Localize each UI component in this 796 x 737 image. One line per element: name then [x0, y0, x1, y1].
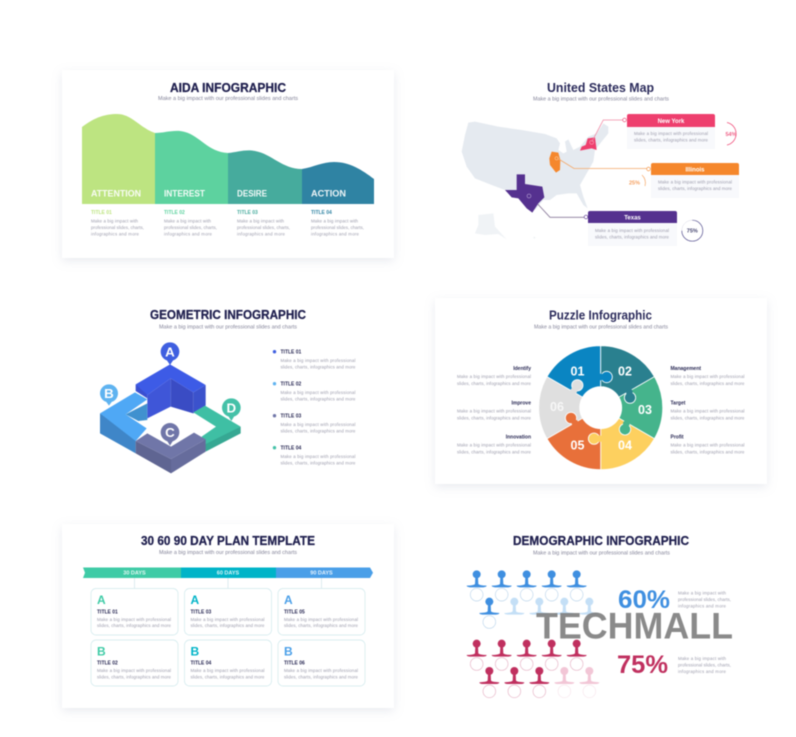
- card: A title 03: A: [190, 593, 200, 607]
- card: B title 02: B: [97, 644, 106, 658]
- panel: AIDA infographic: [62, 70, 394, 258]
- puzzle numbers: 05: [571, 438, 584, 452]
- list item: title 02: [273, 382, 356, 402]
- panel: 30 60 90 day plan: [62, 524, 394, 708]
- column text: interest: professional slides, charts,: [164, 225, 217, 230]
- callout: Texas: slides, charts, infographics and more: [595, 234, 670, 240]
- label: Improve: slides, charts, infographics and more: [457, 416, 532, 420]
- column text: desire: [237, 210, 290, 236]
- label: Profit: Profit: [670, 434, 684, 440]
- panel: United States map: [462, 81, 739, 246]
- list item: title 04: Make a big impact with professional: [280, 454, 356, 459]
- list item: title 03: TITLE 03: [280, 414, 302, 420]
- label: Innovation: [457, 434, 532, 454]
- chart: puzzle ring: [539, 346, 663, 470]
- column text: attention: [91, 210, 144, 236]
- icons: blue pacifiers 60%: [467, 570, 599, 628]
- card: A title 01: A: [97, 593, 106, 607]
- card: A title 05: [278, 588, 365, 635]
- timeline bar: 30 DAYS: [123, 571, 146, 577]
- callout: New York: Make a big impact with professional: [634, 131, 708, 136]
- percent ring: 54%: [725, 122, 737, 145]
- list item: title 02: Make a big impact with professional: [280, 390, 356, 395]
- list item: title 01: TITLE 01: [280, 350, 302, 356]
- marker: D: D: [227, 400, 237, 415]
- timeline bar: 60 DAYS: [217, 571, 240, 577]
- puzzle numbers: [550, 364, 652, 452]
- card: A title 03: [184, 588, 272, 635]
- diagram: isometric square: [100, 342, 241, 473]
- connector: Illinois: [557, 158, 648, 168]
- label: Improve: Make a big impact with professional: [457, 408, 531, 414]
- marker: C: [161, 423, 179, 446]
- title: Geometric: GEOMETRIC INFOGRAPHIC: [150, 308, 306, 322]
- column text: interest: TITLE 02: [164, 210, 185, 216]
- card: B title 06: [278, 640, 365, 686]
- subtitle: Geometric: Make a big impact with our professional slides and charts: [159, 324, 298, 330]
- chart: AIDA wave: DESIRE: [237, 188, 267, 198]
- puzzle numbers: 06: [550, 400, 564, 414]
- stat text: 60%: infographics and more: [678, 604, 727, 608]
- card: B title 02: slides, charts, infographics and more: [97, 674, 172, 680]
- card: B title 06: TITLE 06: [284, 660, 305, 666]
- title: plan: 30 60 90 DAY PLAN TEMPLATE: [141, 534, 315, 548]
- card: A title 05: Make a big impact with professional: [284, 617, 358, 622]
- puzzle numbers: 01: [571, 364, 584, 378]
- card: A title 03: TITLE 03: [190, 610, 212, 616]
- card: A title 05: TITLE 05: [284, 610, 305, 616]
- label: Improve: [457, 400, 532, 420]
- card: A title 01: slides, charts, infographics and more: [97, 623, 172, 628]
- chart: AIDA wave: ATTENTION: [91, 188, 141, 198]
- label: Target: Target: [670, 400, 686, 406]
- list item: title 04: TITLE 04: [280, 446, 302, 452]
- label: Identify: slides, charts, infographics and more: [457, 381, 532, 386]
- stat text: 75%: infographics and more: [678, 669, 727, 674]
- percent ring: 75%: [682, 220, 703, 241]
- label: Improve: Improve: [512, 400, 531, 406]
- subtitle: Puzzle: Make a big impact with our professional slides and charts: [534, 324, 669, 330]
- list item: title 04: [273, 446, 356, 466]
- chart: AIDA wave: [82, 114, 374, 204]
- card: A title 05: A: [284, 593, 293, 607]
- column text: action: infographics and more: [311, 232, 360, 236]
- callout: Illinois: slides, charts, infographics and more: [658, 186, 733, 191]
- card: B title 06: Make a big impact with professional: [284, 668, 358, 673]
- label: Target: [670, 400, 745, 420]
- stat text: 60%: [678, 590, 731, 608]
- list item: title 01: Make a big impact with professional: [280, 358, 356, 363]
- label: Target: slides, charts, infographics and more: [670, 416, 745, 420]
- card: B title 04: TITLE 04: [190, 660, 212, 666]
- column text: action: [311, 210, 364, 236]
- percent ring: 25%: 25%: [629, 180, 640, 186]
- stat text: 75%: Make a big impact with: [678, 656, 727, 661]
- timeline bar: [83, 568, 373, 578]
- label: Innovation: Make a big impact with professional: [457, 442, 531, 448]
- connector lines: [134, 578, 322, 588]
- column text: action: Make a big impact with: [311, 218, 359, 224]
- list item: title 03: Make a big impact with professional: [280, 422, 356, 427]
- column text: interest: [164, 210, 217, 236]
- chart: AIDA wave: ACTION: [311, 188, 346, 198]
- marker: B: [100, 384, 118, 406]
- callout: New York: New York: [658, 119, 685, 125]
- panel: Geometric infographic: [100, 308, 356, 473]
- label: Management: [670, 366, 745, 386]
- list item: title 04: slides, charts, infographics and more: [280, 460, 356, 466]
- callout: New York: slides, charts, infographics and more: [634, 138, 709, 142]
- state: New York: [580, 137, 597, 151]
- stat text: 60%: Make a big impact with: [678, 590, 727, 596]
- stat text: 75%: professional slides, charts,: [678, 662, 731, 668]
- card: B title 04: B: [190, 644, 200, 658]
- list item: title 02: TITLE 02: [280, 382, 302, 388]
- title: United States Map: United States Map: [547, 81, 654, 95]
- marker: A: A: [165, 344, 175, 359]
- icons: red pacifiers 75%: [467, 640, 599, 698]
- label: Identify: Identify: [513, 366, 531, 372]
- block: B: [100, 392, 147, 453]
- label: Innovation: slides, charts, infographics and more: [457, 450, 532, 454]
- callout: Illinois: [647, 163, 739, 198]
- label: Management: Management: [670, 366, 701, 372]
- card: A title 01: Make a big impact with professional: [97, 617, 171, 622]
- card: B title 06: B: [284, 644, 293, 658]
- label: Identify: [457, 366, 532, 386]
- block: A: [136, 364, 206, 418]
- list item: title 03: [273, 414, 356, 434]
- puzzle knobs: [565, 371, 636, 444]
- stat text: 60%: professional slides, charts,: [678, 597, 731, 602]
- puzzle numbers: 02: [618, 364, 632, 378]
- stat: 75%: 75%: [617, 651, 668, 679]
- state: Texas: [505, 174, 544, 213]
- panel: Puzzle infographic: [435, 298, 767, 484]
- label: Profit: [670, 434, 745, 454]
- timeline bar: 90 DAYS: [310, 571, 333, 577]
- card: B title 02: Make a big impact with professional: [97, 668, 171, 673]
- puzzle numbers: 03: [638, 403, 652, 417]
- subtitle: AIDA: Make a big impact with our professional slides and charts: [158, 96, 299, 102]
- title: Puzzle: Puzzle Infographic: [549, 308, 652, 322]
- chart: AIDA wave: INTEREST: [164, 188, 205, 198]
- callout: Illinois: Illinois: [685, 168, 705, 174]
- label: Profit: Make a big impact with professional: [670, 442, 745, 448]
- subtitle: Demographic: Make a big impact with our professional slides and charts: [533, 550, 671, 556]
- column text: attention: infographics and more: [91, 232, 140, 236]
- callout: Texas: [584, 211, 677, 246]
- list item: title 03: slides, charts, infographics and more: [280, 428, 356, 434]
- label: Identify: Make a big impact with professional: [457, 374, 531, 379]
- callout: Texas: Make a big impact with professional: [595, 228, 669, 233]
- panel: Demographic infographic: [467, 534, 731, 698]
- connector: Texas: [538, 204, 586, 217]
- marker: C: C: [165, 425, 175, 440]
- callout: Texas: Texas: [624, 216, 641, 222]
- list item: title 01: [273, 350, 356, 370]
- marker: D: [222, 398, 241, 421]
- block: C: [136, 433, 206, 473]
- stat: 60%: 60%: [618, 586, 670, 614]
- card: B title 06: slides, charts, infographics and more: [284, 674, 359, 680]
- title: AIDA: AIDA INFOGRAPHIC: [170, 81, 286, 95]
- card: B title 02: [91, 640, 178, 686]
- map: USA: [462, 122, 608, 239]
- marker: B: B: [104, 386, 114, 401]
- column text: attention: Make a big impact with: [91, 218, 139, 224]
- label: Management: slides, charts, infographics and more: [670, 381, 745, 386]
- column text: desire: infographics and more: [237, 232, 286, 236]
- list item: title 01: slides, charts, infographics and more: [280, 364, 356, 370]
- column text: action: professional slides, charts,: [311, 225, 364, 230]
- card: B title 04: [184, 640, 272, 686]
- subtitle: map: Make a big impact with our professional slides and charts: [533, 96, 670, 102]
- card: A title 01: [91, 588, 178, 635]
- block: D: [193, 406, 241, 452]
- subtitle: plan: Make a big impact with our professional slides and charts: [159, 550, 298, 556]
- card: A title 03: Make a big impact with professional: [190, 617, 265, 622]
- marker: A: [161, 342, 179, 365]
- percent ring: 75%: 75%: [687, 229, 698, 235]
- percent ring: 25%: [629, 175, 645, 186]
- state: Illinois: [549, 152, 560, 173]
- stat text: 75%: [678, 656, 731, 674]
- label: Innovation: Innovation: [506, 434, 531, 440]
- card: A title 05: slides, charts, infographics and more: [284, 623, 359, 628]
- list item: title 02: slides, charts, infographics and more: [280, 396, 356, 402]
- card: B title 02: TITLE 02: [97, 660, 118, 666]
- watermark: TECHMALL: TECHMALL: [536, 604, 733, 646]
- label: Target: Make a big impact with professional: [670, 408, 745, 414]
- card: B title 04: slides, charts, infographics and more: [190, 674, 265, 680]
- column text: desire: Make a big impact with: [237, 218, 285, 224]
- column text: desire: TITLE 03: [237, 210, 258, 216]
- card: A title 03: slides, charts, infographics and more: [190, 623, 265, 628]
- column text: interest: infographics and more: [164, 232, 213, 236]
- callout: New York: [623, 114, 715, 149]
- column text: desire: professional slides, charts,: [237, 225, 290, 230]
- percent ring: 54%: 54%: [725, 132, 737, 138]
- label: Management: Make a big impact with professional: [670, 374, 745, 379]
- callout: Illinois: Make a big impact with professional: [658, 180, 732, 184]
- card: A title 01: TITLE 01: [97, 610, 118, 616]
- puzzle numbers: 04: [618, 438, 632, 452]
- connector: New York: [592, 120, 624, 142]
- column text: action: TITLE 04: [311, 210, 332, 216]
- column text: attention: professional slides, charts,: [91, 225, 144, 230]
- label: Profit: slides, charts, infographics and more: [670, 450, 745, 454]
- title: Demographic: DEMOGRAPHIC INFOGRAPHIC: [513, 534, 689, 548]
- column text: interest: Make a big impact with: [164, 218, 212, 224]
- card: B title 04: Make a big impact with professional: [190, 668, 265, 673]
- column text: attention: TITLE 01: [91, 210, 112, 216]
